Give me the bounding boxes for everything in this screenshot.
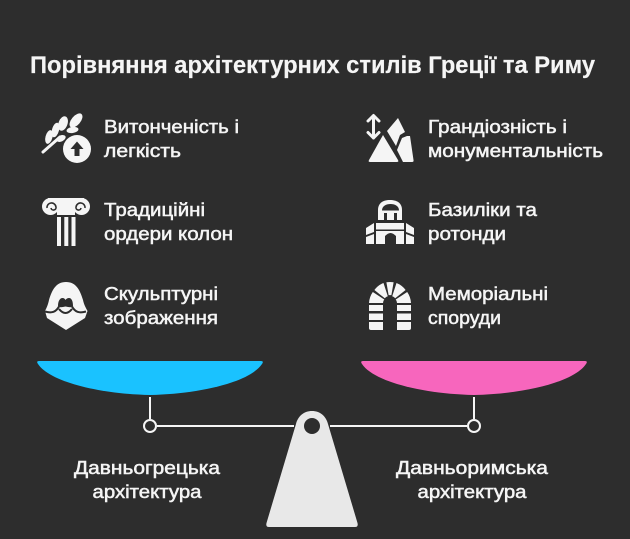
icon: wheat with up arrow — [43, 111, 91, 163]
label: memorials: Меморіальні — [428, 284, 548, 304]
label: elegance: Витонченість і — [104, 117, 239, 137]
icon: column — [42, 198, 90, 246]
label: basilicas — [428, 200, 538, 244]
label: orders: Традиційні — [104, 200, 205, 220]
scale fulcrum — [266, 411, 358, 527]
label: elegance — [104, 117, 239, 161]
title: Порівняння архітектурних стилів Греції та Риму — [30, 52, 595, 79]
scale beam — [150, 397, 474, 426]
label: Roman architecture: Давньоримська — [396, 458, 549, 478]
label: Greek architecture — [74, 458, 221, 502]
left pan: blue — [37, 361, 263, 395]
label: orders: ордери колон — [104, 224, 233, 244]
icon: mountains with height arrow — [368, 116, 414, 162]
label: grandeur — [428, 117, 603, 161]
label: grandeur: Грандіозність і — [428, 117, 567, 137]
right scale joint — [468, 420, 480, 432]
label: memorials: споруди — [428, 308, 501, 328]
label: Greek architecture: архітектура — [92, 482, 203, 502]
left scale joint — [144, 420, 156, 432]
label: memorials — [428, 284, 548, 328]
label: Roman architecture — [396, 458, 549, 502]
label: basilicas: ротонди — [428, 224, 506, 244]
label: elegance: легкість — [104, 141, 181, 161]
icon: basilica — [366, 200, 414, 244]
icon: arch — [369, 282, 411, 330]
label: sculpture: Скульптурні — [104, 284, 218, 304]
label: grandeur: монументальність — [428, 141, 603, 161]
label: sculpture: зображення — [104, 308, 218, 328]
label: basilicas: Базиліки та — [428, 200, 538, 220]
label: sculpture — [104, 284, 218, 328]
right pan: pink — [361, 361, 587, 395]
label: Roman architecture: архітектура — [418, 482, 528, 502]
fulcrum pivot — [304, 418, 320, 434]
icon: bearded face — [45, 282, 88, 330]
label: orders — [104, 200, 233, 244]
label: Greek architecture: Давньогрецька — [74, 458, 221, 478]
